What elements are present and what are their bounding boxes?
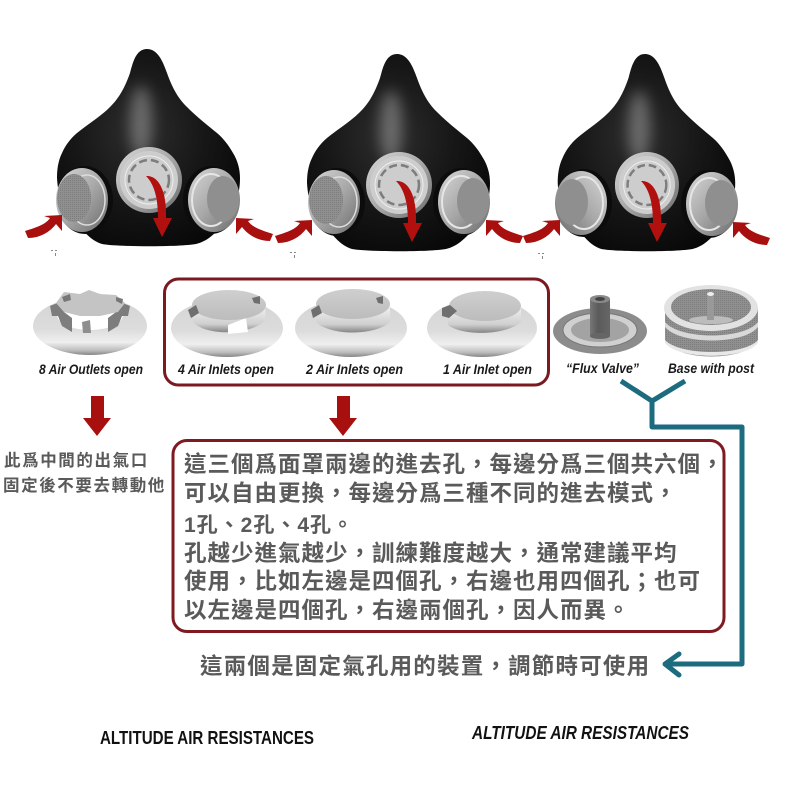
right filter cartridge bbox=[433, 168, 490, 236]
outlet arrow bbox=[146, 176, 172, 237]
note box: inlets explanation bbox=[173, 440, 725, 632]
outlet arrow bbox=[641, 181, 667, 242]
right inlet arrow bbox=[486, 220, 523, 243]
note box: inlets explanation: 使用，比如左邊是四個孔，右邊也用四個孔；也可 bbox=[184, 569, 701, 594]
note box: inlets explanation: 1孔、2孔、4孔。 bbox=[184, 514, 354, 537]
left filter cartridge bbox=[308, 168, 365, 236]
left inlet arrow bbox=[275, 220, 312, 243]
connector arrow: valve parts to note bbox=[621, 381, 742, 675]
left inlet arrow bbox=[523, 220, 560, 243]
label: base with post: Base with post bbox=[668, 360, 755, 376]
right inlet arrow bbox=[236, 218, 273, 241]
left filter cartridge bbox=[56, 166, 113, 234]
note box: inlets explanation: 可以自由更換，每邊分爲三種不同的進去模式， bbox=[184, 481, 678, 506]
label: 1 air inlet open: 1 Air Inlet open bbox=[443, 361, 532, 377]
note box: inlets explanation: 這三個爲面罩兩邊的進去孔，每邊分爲三個共六個， bbox=[184, 451, 725, 477]
left filter cartridge bbox=[555, 169, 612, 237]
note box: inlets explanation: 以左邊是四個孔，右邊兩個孔，因人而異。 bbox=[184, 598, 631, 623]
arrow: down to inlet note bbox=[329, 396, 357, 436]
part: base with post bbox=[664, 285, 758, 356]
note: valve parts: 這兩個是固定氣孔用的裝置，調節時可使用 bbox=[200, 653, 650, 679]
registration specks bbox=[51, 250, 544, 259]
note box: inlets explanation: 孔越少進氣越少，訓練難度越大，通常建議平均 bbox=[184, 541, 678, 566]
note: outlet: 此爲中間的出氣口 bbox=[4, 451, 149, 470]
caption right: ALTITUDE AIR RESISTANCES bbox=[471, 723, 689, 743]
part: flux valve bbox=[553, 295, 647, 354]
caption left: ALTITUDE AIR RESISTANCES bbox=[100, 728, 314, 748]
mask: right, 1 inlet bbox=[523, 54, 770, 251]
part: 4 air inlets disc bbox=[171, 290, 283, 357]
note: outlet bbox=[3, 451, 166, 495]
label: flux valve: “Flux Valve” bbox=[566, 360, 639, 376]
mask: centre, 2 inlets bbox=[275, 54, 523, 251]
part: 8 air outlets disc bbox=[33, 290, 147, 355]
right inlet arrow bbox=[733, 222, 770, 245]
mask: left, 4 inlets bbox=[25, 49, 273, 246]
right filter cartridge bbox=[183, 166, 240, 234]
inlet group frame bbox=[164, 279, 548, 385]
label: 4 air inlets open: 4 Air Inlets open bbox=[177, 361, 274, 377]
label: 2 air inlets open: 2 Air Inlets open bbox=[305, 361, 403, 377]
note: outlet: 固定後不要去轉動他 bbox=[3, 475, 166, 495]
part: 2 air inlets disc bbox=[295, 289, 407, 357]
left inlet arrow bbox=[25, 215, 62, 238]
outlet arrow bbox=[396, 181, 422, 242]
part: 1 air inlet disc bbox=[427, 291, 537, 357]
label: 8 air outlets open: 8 Air Outlets open bbox=[39, 361, 143, 377]
arrow: down to outlet note bbox=[83, 396, 111, 436]
right filter cartridge bbox=[681, 170, 738, 238]
